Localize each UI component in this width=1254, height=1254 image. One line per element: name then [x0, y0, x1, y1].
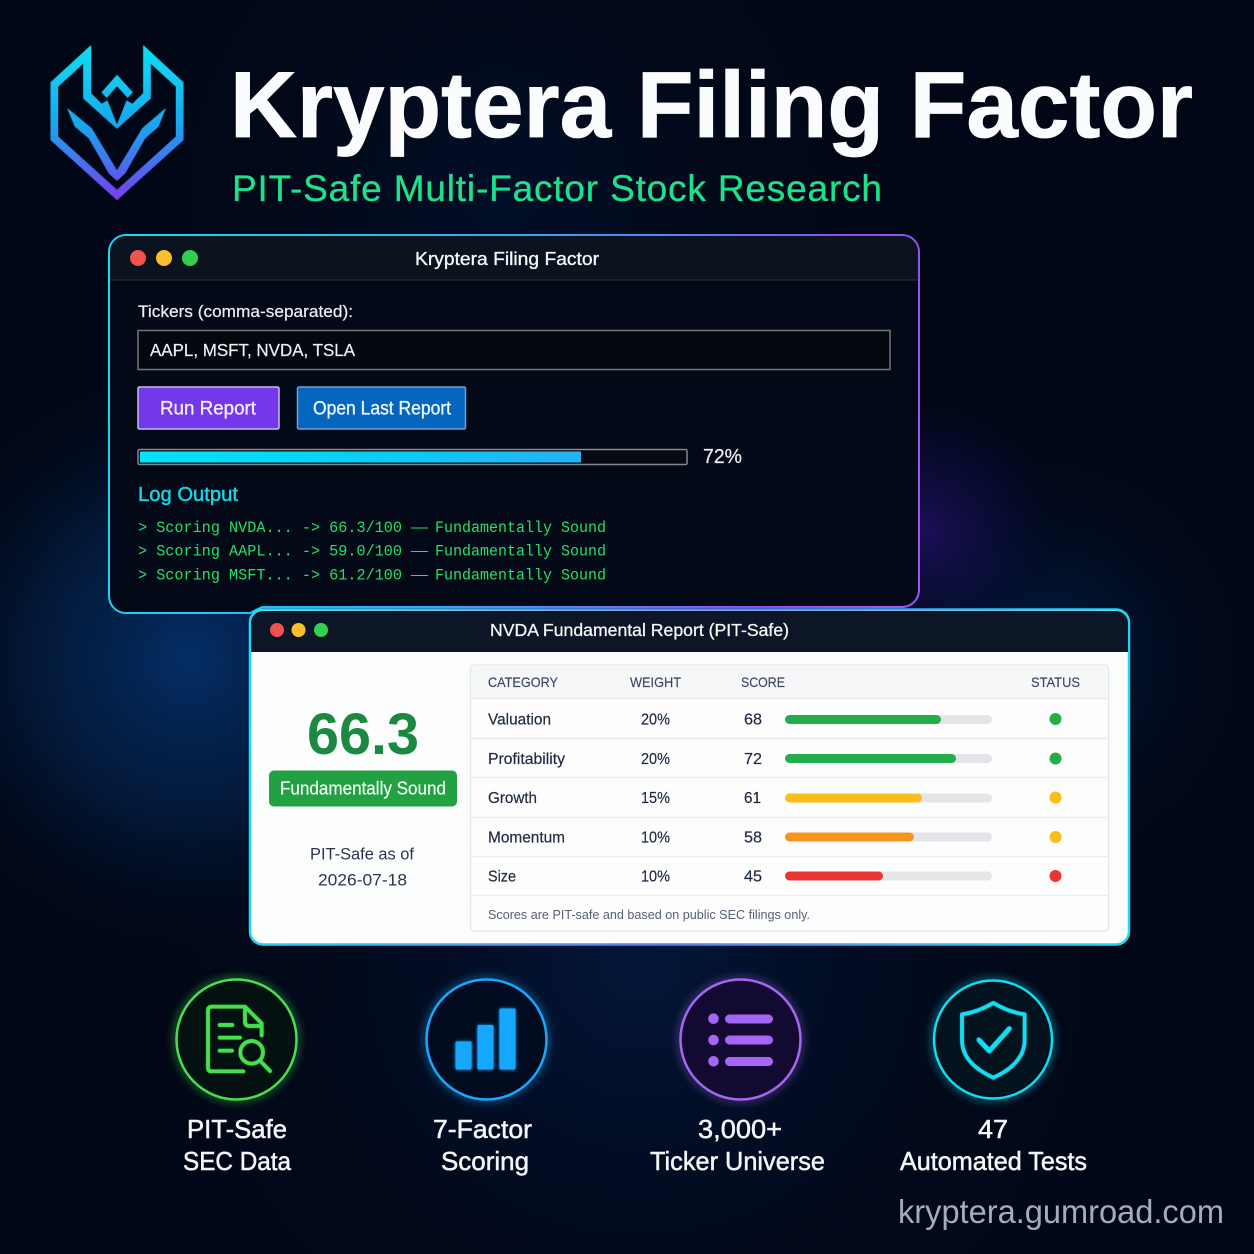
icon: document with magnifier: [176, 978, 298, 1100]
label: [433, 1114, 532, 1176]
log output lines: [138, 519, 606, 584]
row: size: [488, 868, 1062, 886]
PIT-safe date: 2026-07-18: [318, 870, 407, 890]
tickers label: Tickers (comma-separated):: [138, 302, 353, 321]
log output lines: —: [409, 542, 430, 560]
website url: kryptera.gumroad.com: [898, 1193, 1224, 1230]
row: size: Size: [488, 868, 516, 886]
log output heading: Log Output: [138, 484, 238, 506]
row: valuation: [488, 712, 1062, 728]
label: SEC Data: [183, 1146, 291, 1176]
feature: PIT-safe SEC data: [176, 978, 298, 1176]
progress bar 72%: 72%: [703, 446, 742, 468]
feature: 7-factor scoring: [426, 978, 548, 1176]
report title bar: NVDA Fundamental Report (PIT-Safe): [490, 620, 789, 640]
row: profitability: 20%: [641, 751, 670, 768]
icon: shield with check: [933, 980, 1053, 1100]
log output lines: > Scoring NVDA... -> 66.3/100: [138, 519, 402, 537]
logo: geometric fox shield: [51, 45, 183, 200]
subtitle: PIT-Safe Multi-Factor Stock Research: [232, 168, 882, 209]
table footnote: Scores are PIT-safe and based on public SEC filings only.: [488, 908, 810, 922]
row: size: 10%: [641, 868, 670, 886]
label: 47: [978, 1114, 1008, 1144]
row: valuation: 68: [744, 712, 762, 728]
label: PIT-Safe: [187, 1114, 287, 1144]
title: Kryptera Filing Factor: [230, 52, 1193, 157]
log output lines: Fundamentally Sound: [435, 519, 606, 537]
row: size: 45: [744, 868, 762, 886]
row: valuation: 20%: [641, 712, 670, 728]
table header: WEIGHT: [630, 674, 681, 690]
label: Automated Tests: [900, 1146, 1087, 1176]
badge: fundamentally sound: Fundamentally Sound: [280, 778, 446, 798]
row: profitability: [488, 751, 1062, 768]
button: run report: [138, 387, 279, 429]
button: run report: Run Report: [160, 398, 257, 420]
feature: 47 automated tests: [900, 980, 1087, 1176]
row: profitability: Profitability: [488, 751, 565, 768]
tickers input: AAPL, MSFT, NVDA, TSLA: [150, 340, 355, 360]
log output lines: —: [409, 566, 430, 584]
report title bar: [251, 611, 1128, 652]
factor score table: [470, 665, 1108, 931]
log output lines: > Scoring MSFT... -> 61.2/100: [138, 566, 402, 584]
icon: bar chart: [426, 978, 548, 1100]
label: [650, 1114, 825, 1176]
panel: NVDA fundamental report window: [250, 610, 1129, 944]
label: [183, 1114, 291, 1176]
row: growth: Growth: [488, 790, 537, 807]
row: growth: [488, 790, 1062, 807]
label: Ticker Universe: [650, 1146, 825, 1176]
panel: Kryptera Filing Factor app window: [109, 235, 919, 613]
log output lines: —: [409, 519, 430, 537]
row: valuation: Valuation: [488, 712, 551, 728]
label: [900, 1114, 1087, 1176]
button: open last report: [298, 387, 466, 429]
label: 3,000+: [698, 1114, 782, 1144]
row: growth: 61: [744, 790, 761, 807]
table header: SCORE: [741, 674, 785, 690]
label: Scoring: [441, 1146, 529, 1176]
row: momentum: 10%: [641, 830, 670, 846]
row: profitability: 72: [744, 751, 762, 768]
table header: STATUS: [1031, 674, 1080, 690]
log output lines: Fundamentally Sound: [435, 566, 606, 584]
button: open last report: Open Last Report: [313, 398, 452, 420]
row: momentum: Momentum: [488, 830, 565, 846]
row: growth: 15%: [641, 790, 670, 807]
table header: CATEGORY: [488, 674, 559, 690]
icon: list: [680, 978, 802, 1100]
row: momentum: [488, 830, 1062, 846]
PIT-safe date: PIT-Safe as of: [310, 844, 414, 864]
badge: fundamentally sound: [269, 770, 457, 806]
log output lines: Fundamentally Sound: [435, 542, 606, 560]
overall score 66.3: 66.3: [307, 702, 419, 767]
label: 7-Factor: [433, 1114, 532, 1144]
table header: [488, 674, 1080, 690]
window title bar: Kryptera Filing Factor: [415, 249, 599, 269]
log output lines: > Scoring AAPL... -> 59.0/100: [138, 542, 402, 560]
row: momentum: 58: [744, 830, 762, 846]
PIT-safe date: [310, 844, 414, 890]
tickers input: [138, 330, 890, 370]
feature: 3,000+ ticker universe: [650, 978, 825, 1176]
progress bar 72%: [138, 446, 742, 468]
window title bar: [110, 236, 918, 280]
